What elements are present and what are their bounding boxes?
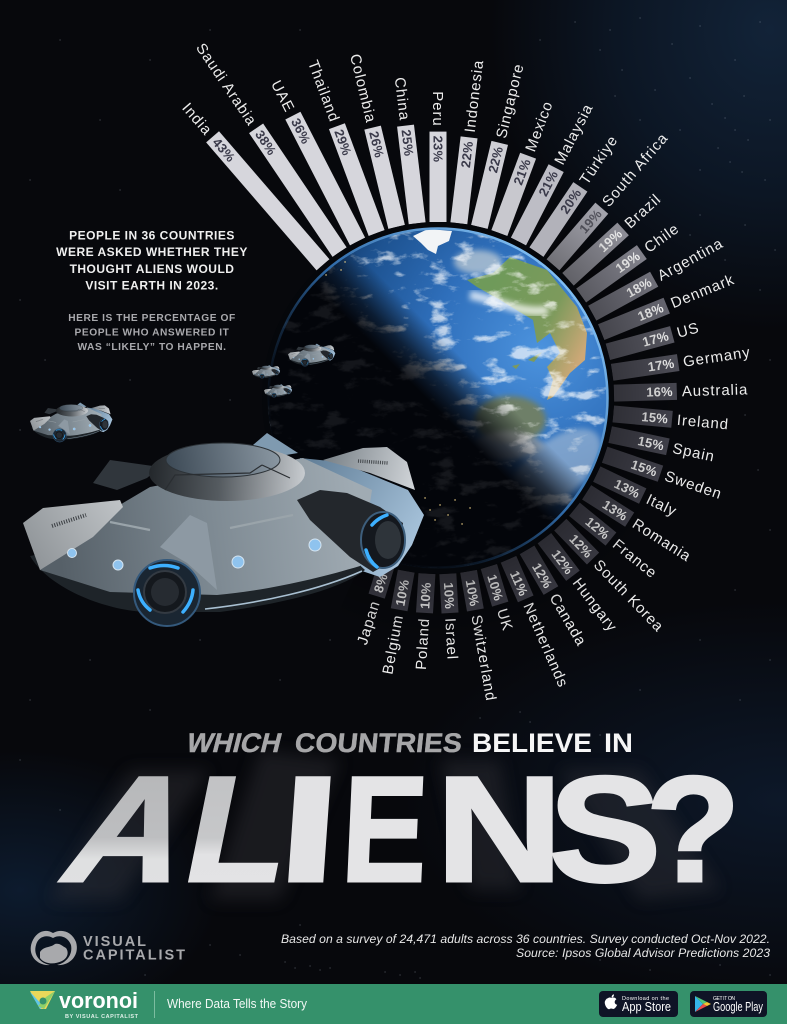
- text block: survey intro: [56, 228, 248, 353]
- bar: India 43%: 43%: [210, 135, 238, 165]
- ship left pod: [23, 500, 123, 570]
- bar: Denmark 18%: [598, 271, 737, 340]
- bar: Israel 10%: 10%: [441, 582, 457, 610]
- bar: Switzerland 10%: Switzerland: [467, 614, 499, 703]
- bar: Sweden 15%: 15%: [629, 457, 659, 480]
- bar: Thailand 29%: Thailand: [304, 58, 343, 125]
- ship plate details: [110, 515, 293, 530]
- bar: Netherlands 11%: 11%: [507, 568, 531, 598]
- logo icon: [31, 931, 77, 965]
- bar: Turkiye 20%: 20%: [557, 186, 584, 217]
- globe: Earth: [260, 220, 620, 580]
- bar: Romania 13%: [582, 485, 694, 565]
- bar: Peru 23%: Peru: [429, 91, 446, 127]
- bar: Mexico 21%: [491, 98, 557, 236]
- bar: Turkiye 20%: Türkiye: [577, 132, 622, 188]
- bar: Netherlands 11%: [500, 556, 572, 690]
- voronoi icon: [30, 991, 55, 1009]
- bar: Romania 13%: Romania: [629, 516, 694, 565]
- bar: Chile 19%: 19%: [613, 248, 643, 276]
- city lights: [326, 262, 470, 524]
- bar: South Africa 19%: 19%: [576, 206, 605, 236]
- source note: Based on a survey of 24,471 adults across 36 countries. Survey conducted Oct-Nov 2022.: [281, 932, 770, 946]
- ship right hull: [300, 458, 424, 577]
- bar: China 25%: 25%: [399, 129, 417, 157]
- land: South America: [474, 396, 546, 444]
- tagline: Where Data Tells the Story: [167, 997, 308, 1011]
- badge: Google Play: Google Play: [713, 1000, 764, 1014]
- explanation paragraph: WAS “LIKELY” TO HAPPEN.: [77, 342, 227, 353]
- logo wordmark: [83, 934, 185, 964]
- bar: Colombia 26%: 26%: [366, 130, 387, 159]
- chart: radial bars of share answering likely, by country: [178, 40, 752, 703]
- bar: Chile 19%: Chile: [641, 220, 683, 256]
- bar: Sweden 15%: [602, 447, 724, 503]
- bar: Malaysia 21%: 21%: [535, 168, 561, 199]
- bar: Brazil 19%: 19%: [595, 226, 625, 255]
- bar: Australia 16%: Australia: [682, 381, 748, 400]
- bar: UAE 36%: UAE: [267, 78, 298, 115]
- bar: Australia 16%: 16%: [646, 384, 673, 400]
- bar: Israel 10%: Israel: [441, 618, 461, 660]
- bar: China 25%: China: [391, 76, 413, 122]
- bar: Denmark 18%: Denmark: [668, 271, 737, 312]
- bar: Spain 15%: 15%: [636, 433, 666, 453]
- bar: UK 10%: [480, 564, 516, 633]
- ship skirt: [30, 550, 365, 612]
- spaceship: main saucer: [23, 433, 424, 626]
- bar: Ireland 15%: [612, 405, 730, 433]
- title: which countries believe in: IN: [604, 728, 633, 758]
- bar: Chile 19%: [576, 220, 683, 303]
- bar: Italy 13%: 13%: [612, 476, 643, 501]
- bar: Poland 10%: 10%: [417, 582, 434, 609]
- bar: US 17%: US: [675, 319, 701, 342]
- intro paragraph: [56, 228, 248, 292]
- land: Caribbean islands: [512, 352, 542, 369]
- bar: Indonesia 22%: 22%: [458, 140, 476, 169]
- logo wordmark: VISUAL: [83, 934, 146, 950]
- bar: Belgium 10%: [379, 570, 415, 676]
- bar: Switzerland 10%: 10%: [463, 579, 482, 608]
- bar: China 25%: [391, 76, 426, 224]
- title: which countries believe in: [184, 727, 633, 758]
- title: which countries believe in: COUNTRIES: [293, 727, 464, 758]
- bar: Italy 13%: Italy: [643, 491, 680, 520]
- explanation paragraph: PEOPLE WHO ANSWERED IT: [75, 328, 230, 338]
- badge: App Store: App Store: [622, 999, 671, 1014]
- land: North America: [467, 257, 587, 400]
- bar: Poland 10%: [412, 573, 436, 670]
- badge: App Store: Download on the: [622, 996, 669, 1002]
- source note: [281, 932, 770, 960]
- bar: Indonesia 22%: Indonesia: [462, 59, 487, 133]
- spaceship: tiny upper: [252, 365, 280, 379]
- bar: Canada 12%: Canada: [546, 591, 590, 649]
- bar: Thailand 29%: [304, 58, 385, 236]
- bar: UAE 36%: [267, 77, 365, 246]
- title: ALIENS?: ?: [646, 746, 740, 914]
- logo: Visual Capitalist: [31, 931, 185, 965]
- cloud bands: [268, 228, 608, 568]
- terminator: night shadow: [268, 254, 583, 568]
- bar: South Korea 12%: South Korea: [590, 557, 667, 636]
- bar: Belgium 10%: Belgium: [379, 613, 407, 676]
- bar: US 17%: 17%: [641, 328, 671, 350]
- title: ALIENS?: S: [549, 745, 661, 913]
- ship rear fin: [253, 433, 298, 456]
- title: which countries believe in: WHICH: [184, 727, 285, 758]
- logo wordmark: CAPITALIST: [83, 948, 185, 964]
- bar: South Korea 12%: [554, 519, 667, 636]
- bar: Turkiye 20%: [529, 132, 622, 257]
- bar: Spain 15%: Spain: [671, 440, 716, 466]
- bar: Germany 17%: [611, 343, 752, 381]
- bar: Colombia 26%: Colombia: [346, 52, 379, 125]
- bar: Canada 12%: [519, 546, 590, 649]
- bar: Australia 16%: [614, 381, 748, 402]
- bar: India 43%: [178, 99, 329, 271]
- bar: Argentina 18%: Argentina: [655, 235, 726, 285]
- intro paragraph: WERE ASKED WHETHER THEY: [56, 245, 248, 259]
- bar: Japan 8%: 8%: [371, 572, 391, 595]
- bar: Ireland 15%: 15%: [641, 409, 669, 426]
- bar: Argentina 18%: [588, 234, 726, 321]
- bar: France 12%: [569, 503, 661, 582]
- bar: Singapore 22%: 22%: [485, 145, 506, 174]
- bar: Colombia 26%: [346, 52, 405, 229]
- explanation paragraph: [68, 313, 236, 353]
- title: ALIENS?: A: [43, 745, 223, 913]
- voronoi wordmark: voronoi: [59, 988, 138, 1013]
- spaceship: small far left: [30, 402, 112, 442]
- bar: South Africa 19%: South Africa: [599, 130, 672, 210]
- bar: Sweden 15%: Sweden: [662, 468, 724, 503]
- bar: France 12%: France: [609, 536, 660, 582]
- bar: US 17%: [606, 319, 701, 361]
- ship front pod: [160, 515, 217, 590]
- bar: UAE 36%: 36%: [288, 116, 314, 146]
- bar: Saudi Arabia 38%: Saudi Arabia: [192, 40, 260, 129]
- ship main plate: [40, 458, 372, 595]
- bar: South Korea 12%: 12%: [566, 531, 596, 561]
- ship dome: [149, 445, 305, 501]
- bar: Hungary 12%: 12%: [548, 547, 577, 577]
- title: ALIENS?: E: [339, 745, 431, 913]
- bar: Romania 13%: 13%: [600, 497, 631, 524]
- title: ALIENS?: [43, 745, 740, 914]
- bar: India 43%: India: [178, 100, 215, 139]
- bar: Saudi Arabia 38%: [192, 40, 347, 257]
- footer bar: BY VISUAL CAPITALIST: [65, 1014, 139, 1020]
- bar: Malaysia 21%: [511, 101, 597, 246]
- intro paragraph: VISIT EARTH IN 2023.: [85, 278, 219, 292]
- bar: Thailand 29%: 29%: [331, 127, 355, 158]
- bar: Saudi Arabia 38%: 38%: [252, 127, 280, 158]
- bar: Hungary 12%: [537, 533, 621, 635]
- bar: Israel 10%: [439, 573, 461, 660]
- bar: Denmark 18%: 18%: [636, 300, 666, 324]
- ship front engine: [134, 560, 200, 626]
- bar: UK 10%: UK: [493, 607, 516, 633]
- bar: Brazil 19%: Brazil: [621, 191, 665, 232]
- title: ALIENS?: I: [274, 746, 345, 913]
- ship right engine: [297, 490, 403, 572]
- bar: Poland 10%: Poland: [413, 617, 433, 670]
- bar: Canada 12%: 12%: [529, 560, 556, 591]
- bar: Germany 17%: Germany: [682, 344, 752, 371]
- bar: Netherlands 11%: Netherlands: [520, 600, 571, 690]
- bar: Indonesia 22%: [450, 59, 487, 224]
- spaceship: tiny lower: [264, 384, 292, 398]
- bar: Spain 15%: [608, 426, 716, 466]
- source note: Source: Ipsos Global Advisor Predictions 2023: [516, 946, 770, 960]
- badge: Google Play: GET IT ON: [713, 996, 735, 1002]
- intro paragraph: PEOPLE IN 36 COUNTRIES: [69, 228, 235, 242]
- ship right pod: [323, 447, 415, 490]
- land: Greenland: [413, 229, 452, 254]
- land: Arctic islands under cloud: [454, 250, 502, 274]
- bar: Japan 8%: Japan: [354, 599, 384, 647]
- bar: Ireland 15%: Ireland: [676, 412, 730, 433]
- intro paragraph: THOUGHT ALIENS WOULD: [70, 262, 234, 276]
- bar: Mexico 21%: Mexico: [522, 99, 557, 154]
- bar: Japan 8%: [354, 564, 395, 647]
- bar: Germany 17%: 17%: [647, 356, 676, 374]
- bar: Singapore 22%: Singapore: [493, 62, 528, 140]
- badge: App Store: [599, 991, 678, 1017]
- bar: Hungary 12%: Hungary: [569, 575, 620, 635]
- decorative title streaks: [50, 750, 720, 900]
- bar: Switzerland 10%: [460, 570, 500, 703]
- bar: Italy 13%: [593, 466, 680, 520]
- title: ALIENS?: N: [436, 745, 563, 913]
- badge: Google Play: [690, 991, 767, 1017]
- ship rear pod: [93, 460, 160, 490]
- title: which countries believe in: BELIEVE: [472, 728, 592, 758]
- bar: Brazil 19%: [562, 190, 665, 286]
- bar: Belgium 10%: 10%: [392, 578, 412, 607]
- bar: UK 10%: 10%: [484, 573, 506, 603]
- bar: Mexico 21%: 21%: [510, 157, 534, 187]
- bar: Argentina 18%: 18%: [624, 274, 654, 300]
- explanation paragraph: HERE IS THE PERCENTAGE OF: [68, 313, 236, 324]
- spaceship: small near globe: [288, 344, 335, 366]
- bar: Peru 23%: [429, 91, 446, 222]
- title: ALIENS?: L: [172, 746, 305, 913]
- bar: Peru 23%: 23%: [430, 136, 446, 162]
- footer bar: [0, 984, 787, 1024]
- bar: South Africa 19%: [547, 129, 672, 271]
- bar: Malaysia 21%: Malaysia: [551, 101, 597, 168]
- bar: France 12%: 12%: [582, 514, 613, 543]
- bar: Singapore 22%: [471, 62, 528, 229]
